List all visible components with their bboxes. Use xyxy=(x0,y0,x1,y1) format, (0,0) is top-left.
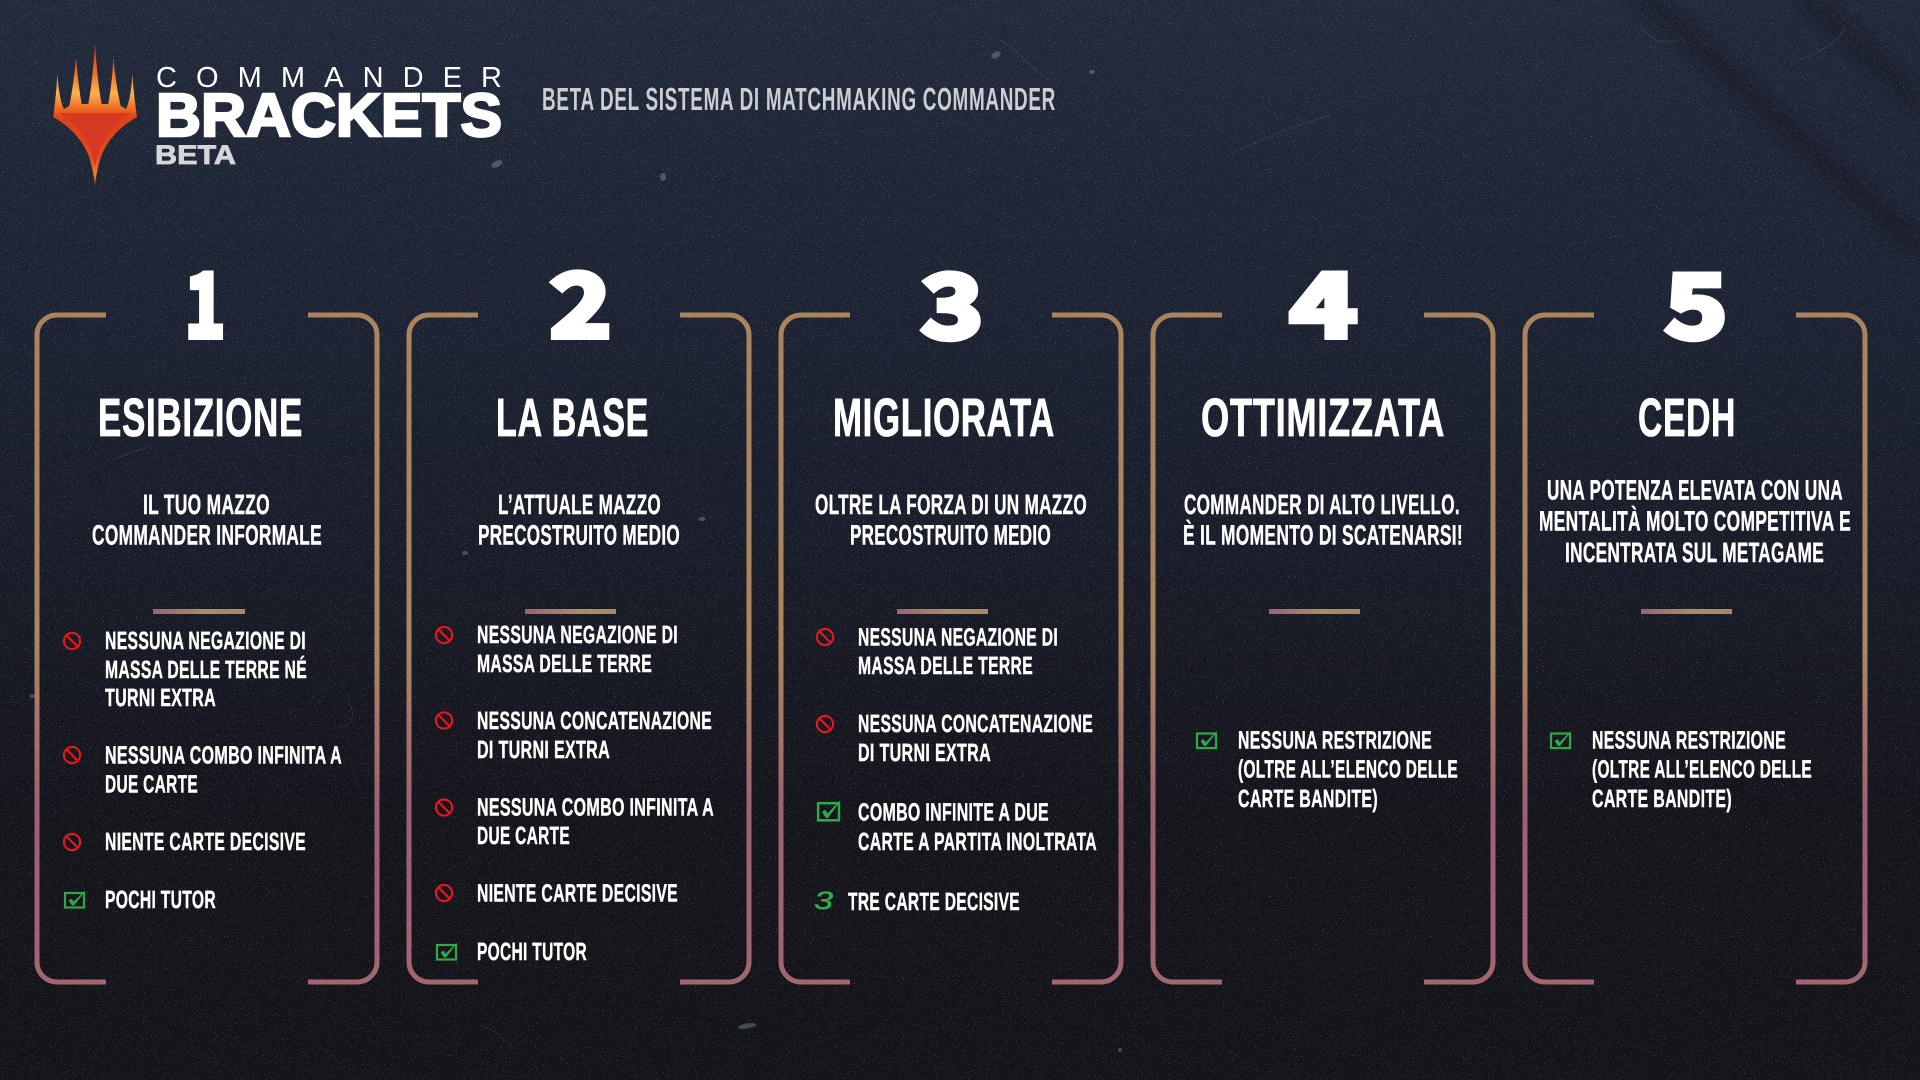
panel frame xyxy=(37,315,377,982)
rule: land denial xyxy=(858,624,1058,680)
rule: land denial: MASSA DELLE TERRE xyxy=(477,650,652,678)
divider xyxy=(897,609,988,614)
divider xyxy=(1269,609,1360,614)
heading: ESIBIZIONE xyxy=(98,388,303,448)
rule list xyxy=(64,627,342,914)
bracket number 1: 1 xyxy=(185,236,225,363)
icon: number three: 3 xyxy=(814,887,833,915)
rule: no restrictions xyxy=(1592,726,1812,813)
icon: prohibited xyxy=(817,716,833,732)
description: OLTRE LA FORZA DI UN MAZZO xyxy=(815,489,1087,520)
rule: two card combo xyxy=(105,742,342,798)
heading: LA BASE xyxy=(496,388,649,448)
rule list xyxy=(1551,726,1812,813)
rule: no restrictions: NESSUNA RESTRIZIONE xyxy=(1238,726,1432,754)
panel: 5 cEDH xyxy=(1525,237,1865,982)
rule: extra turns: NESSUNA CONCATENAZIONE xyxy=(858,710,1093,738)
description xyxy=(478,489,680,550)
divider xyxy=(1641,609,1732,614)
description: COMMANDER INFORMALE xyxy=(92,520,322,550)
bracket number 4: 4 xyxy=(1290,236,1357,363)
heading: MIGLIORATA xyxy=(833,388,1055,448)
description: IL TUO MAZZO xyxy=(143,489,270,520)
rule list xyxy=(1197,726,1458,813)
rule: tutors: POCHI TUTOR xyxy=(105,886,216,914)
bracket number 2: 2 xyxy=(550,236,611,363)
description: PRECOSTRUITO MEDIO xyxy=(478,520,680,550)
panel frame xyxy=(781,315,1121,982)
panel frame xyxy=(409,315,749,982)
rule: land denial xyxy=(105,627,307,712)
rule: extra turns xyxy=(477,707,712,764)
rule: two card combo: DUE CARTE xyxy=(477,822,570,850)
rule list xyxy=(814,624,1097,916)
description xyxy=(1539,474,1851,568)
rule: game changers: TRE CARTE DECISIVE xyxy=(848,888,1020,916)
description xyxy=(1183,489,1463,550)
rule: no restrictions: CARTE BANDITE) xyxy=(1592,785,1732,813)
rule: no restrictions: NESSUNA RESTRIZIONE xyxy=(1592,726,1786,754)
heading: CEDH xyxy=(1638,388,1736,448)
bracket number 5: 5 xyxy=(1665,237,1727,364)
icon: check xyxy=(818,801,840,820)
rule: game changers: NIENTE CARTE DECISIVE xyxy=(477,880,678,908)
icon: prohibited xyxy=(436,712,452,729)
panel: 1 Esibizione xyxy=(37,236,377,982)
wordmark: beta: BETA xyxy=(155,140,236,170)
description xyxy=(92,489,322,550)
rule: tutors: POCHI TUTOR xyxy=(477,938,587,966)
rule: two card combo: NESSUNA COMBO INFINITA A xyxy=(477,794,714,822)
icon: check xyxy=(1551,732,1571,748)
rule: two card combo: NESSUNA COMBO INFINITA A xyxy=(105,742,342,770)
rule: two card combo xyxy=(477,794,714,850)
rule: land denial: MASSA DELLE TERRE NÉ xyxy=(105,655,307,684)
rule: land denial: NESSUNA NEGAZIONE DI xyxy=(105,627,306,655)
rule: late game combos: CARTE A PARTITA INOLTRATA xyxy=(858,828,1097,856)
description: COMMANDER DI ALTO LIVELLO. xyxy=(1184,489,1460,520)
icon: planeswalker flame xyxy=(53,43,137,186)
rule: extra turns xyxy=(858,710,1093,767)
rule: no restrictions xyxy=(1238,726,1458,813)
rule: no restrictions: (OLTRE ALL’ELENCO DELLE xyxy=(1238,756,1458,784)
rule: land denial: NESSUNA NEGAZIONE DI xyxy=(477,621,678,649)
panel frame xyxy=(1525,315,1865,982)
icon: prohibited xyxy=(64,633,80,649)
rule: game changers: NIENTE CARTE DECISIVE xyxy=(105,828,306,856)
rule: late game combos xyxy=(858,798,1097,856)
icon: check xyxy=(437,943,457,960)
heading: OTTIMIZZATA xyxy=(1201,388,1445,448)
icon: prohibited xyxy=(436,799,452,816)
rule: no restrictions: CARTE BANDITE) xyxy=(1238,785,1378,813)
panel frame xyxy=(1153,315,1493,982)
panel: 4 Ottimizzata xyxy=(1153,236,1493,982)
icon: check xyxy=(65,891,85,908)
rule: extra turns: DI TURNI EXTRA xyxy=(477,736,610,764)
description xyxy=(815,489,1087,550)
icon: prohibited xyxy=(436,885,452,901)
icon: prohibited xyxy=(817,629,833,645)
panel: 3 Migliorata xyxy=(781,237,1121,982)
rule: land denial: MASSA DELLE TERRE xyxy=(858,652,1033,680)
rule: two card combo: DUE CARTE xyxy=(105,770,198,798)
divider xyxy=(525,609,616,614)
rule: land denial: TURNI EXTRA xyxy=(105,684,216,712)
icon: prohibited xyxy=(64,747,80,763)
icon: check xyxy=(1197,732,1217,748)
bracket number 3: 3 xyxy=(921,237,983,364)
description: PRECOSTRUITO MEDIO xyxy=(850,520,1051,550)
rule: extra turns: NESSUNA CONCATENAZIONE xyxy=(477,707,712,735)
rule: land denial: NESSUNA NEGAZIONE DI xyxy=(858,624,1058,652)
rule: late game combos: COMBO INFINITE A DUE xyxy=(858,798,1049,826)
divider xyxy=(153,609,245,614)
subtitle: BETA DEL SISTEMA DI MATCHMAKING COMMANDER xyxy=(542,81,1056,117)
wordmark: brackets: BRACKETS xyxy=(156,81,502,149)
wordmark: commander: COMMANDER xyxy=(156,62,502,94)
rule list xyxy=(436,621,714,966)
header logo: Commander Brackets Beta xyxy=(53,43,502,186)
icon: prohibited xyxy=(436,627,452,643)
rule: extra turns: DI TURNI EXTRA xyxy=(858,739,991,767)
panel: 2 La Base xyxy=(409,236,749,982)
description: È IL MOMENTO DI SCATENARSI! xyxy=(1183,520,1463,550)
description: L’ATTUALE MAZZO xyxy=(498,489,661,520)
rule: land denial xyxy=(477,621,678,678)
icon: prohibited xyxy=(64,834,80,850)
